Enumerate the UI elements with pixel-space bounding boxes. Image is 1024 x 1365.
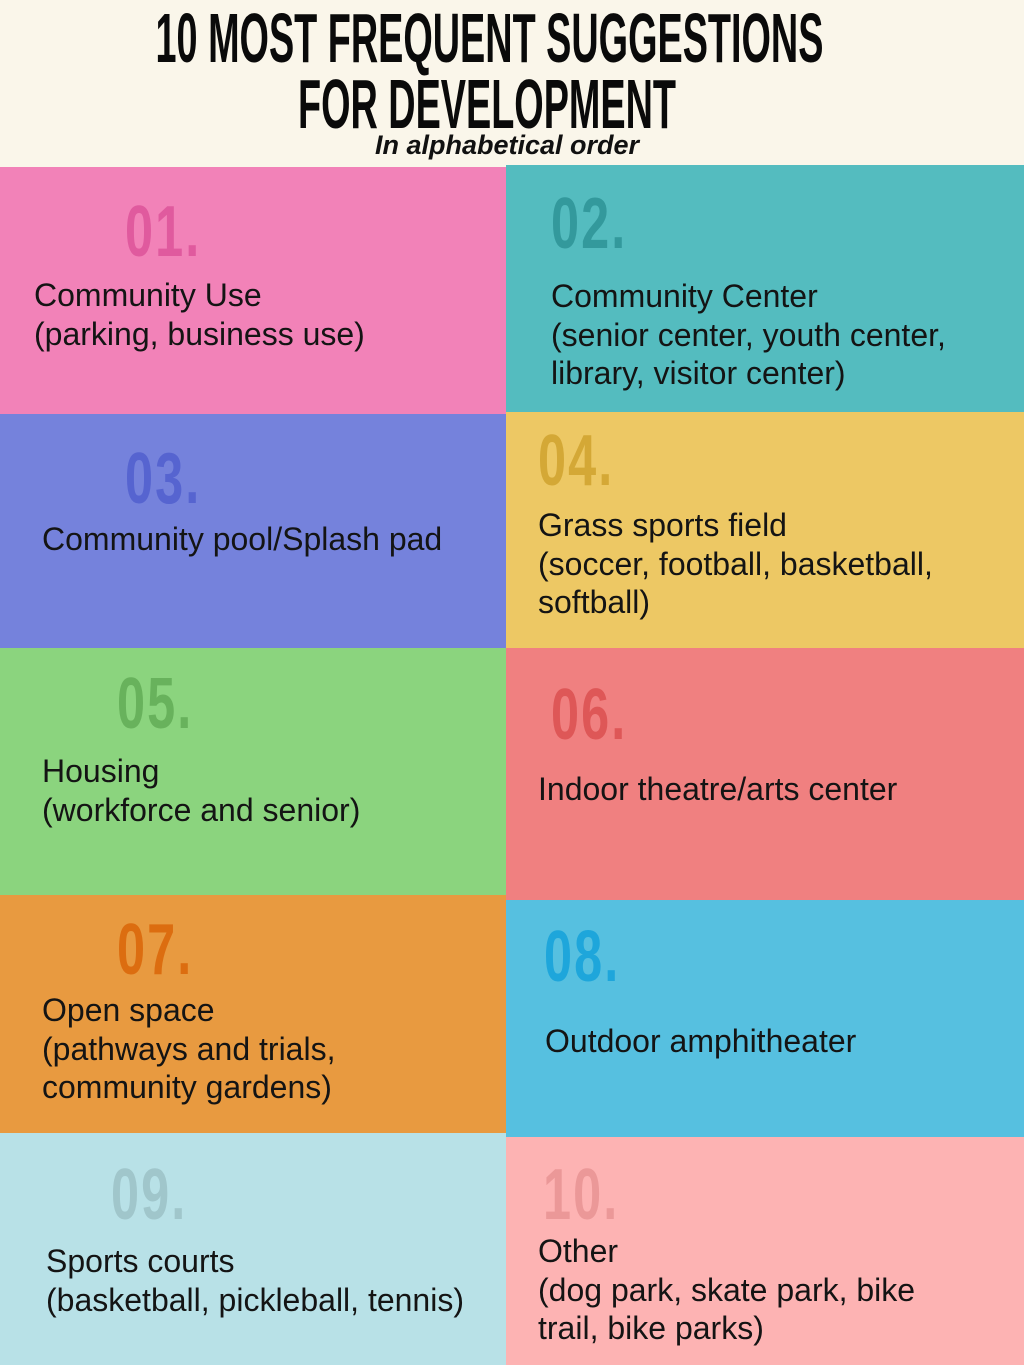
title xyxy=(156,0,823,160)
panel: 04: Grass sports field xyxy=(538,507,787,543)
panel: 05 xyxy=(0,648,506,895)
panel: 02: (senior center, youth center, xyxy=(551,316,946,352)
panel: 02: 02. xyxy=(551,184,627,264)
panel: 02: library, visitor center) xyxy=(551,355,846,391)
panel: 07: 07. xyxy=(117,910,193,990)
panel: 07: Open space xyxy=(42,992,215,1028)
panel: 02 xyxy=(506,165,1024,412)
panel: 01: (parking, business use) xyxy=(34,316,365,352)
panel: 10: (dog park, skate park, bike xyxy=(538,1272,915,1308)
panel: 05: 05. xyxy=(117,664,193,744)
panel: 04 xyxy=(506,412,1024,648)
panel: 01 xyxy=(0,167,506,414)
panel: 03 xyxy=(0,414,506,648)
panel: 06: 06. xyxy=(551,675,627,755)
panel: 04: (soccer, football, basketball, xyxy=(538,546,933,582)
panel: 03: Community pool/Splash pad xyxy=(42,521,442,557)
panel: 06: Indoor theatre/arts center xyxy=(538,771,897,807)
panel: 01: 01. xyxy=(125,192,201,272)
title: FOR DEVELOPMENT xyxy=(298,65,676,143)
panel: 05: Housing xyxy=(42,753,159,789)
panel: 10: 10. xyxy=(543,1155,619,1235)
panel: 01: Community Use xyxy=(34,277,262,313)
panel: 03: 03. xyxy=(125,439,201,519)
panel: 07: community gardens) xyxy=(42,1069,332,1105)
panel: 08: Outdoor amphitheater xyxy=(545,1023,856,1059)
panel: 10 xyxy=(506,1137,1024,1365)
panel: 09: 09. xyxy=(111,1155,187,1235)
panel: 09: Sports courts xyxy=(46,1243,235,1279)
title: 10 MOST FREQUENT SUGGESTIONS xyxy=(156,0,823,77)
panel: 09 xyxy=(0,1133,506,1365)
panel: 08: 08. xyxy=(544,917,620,997)
panel: 08 xyxy=(506,900,1024,1137)
panel: 06 xyxy=(506,648,1024,900)
panel: 10: trail, bike parks) xyxy=(538,1310,764,1346)
panel: 04: softball) xyxy=(538,584,650,620)
panel: 05: (workforce and senior) xyxy=(42,792,360,828)
title: In alphabetical order xyxy=(375,130,639,160)
panel: 02: Community Center xyxy=(551,278,818,314)
panel: 07: (pathways and trials, xyxy=(42,1030,335,1066)
panel: 10: Other xyxy=(538,1233,618,1269)
panel: 07 xyxy=(0,895,506,1133)
panel: 09: (basketball, pickleball, tennis) xyxy=(46,1282,464,1318)
panel: 04: 04. xyxy=(538,421,614,501)
